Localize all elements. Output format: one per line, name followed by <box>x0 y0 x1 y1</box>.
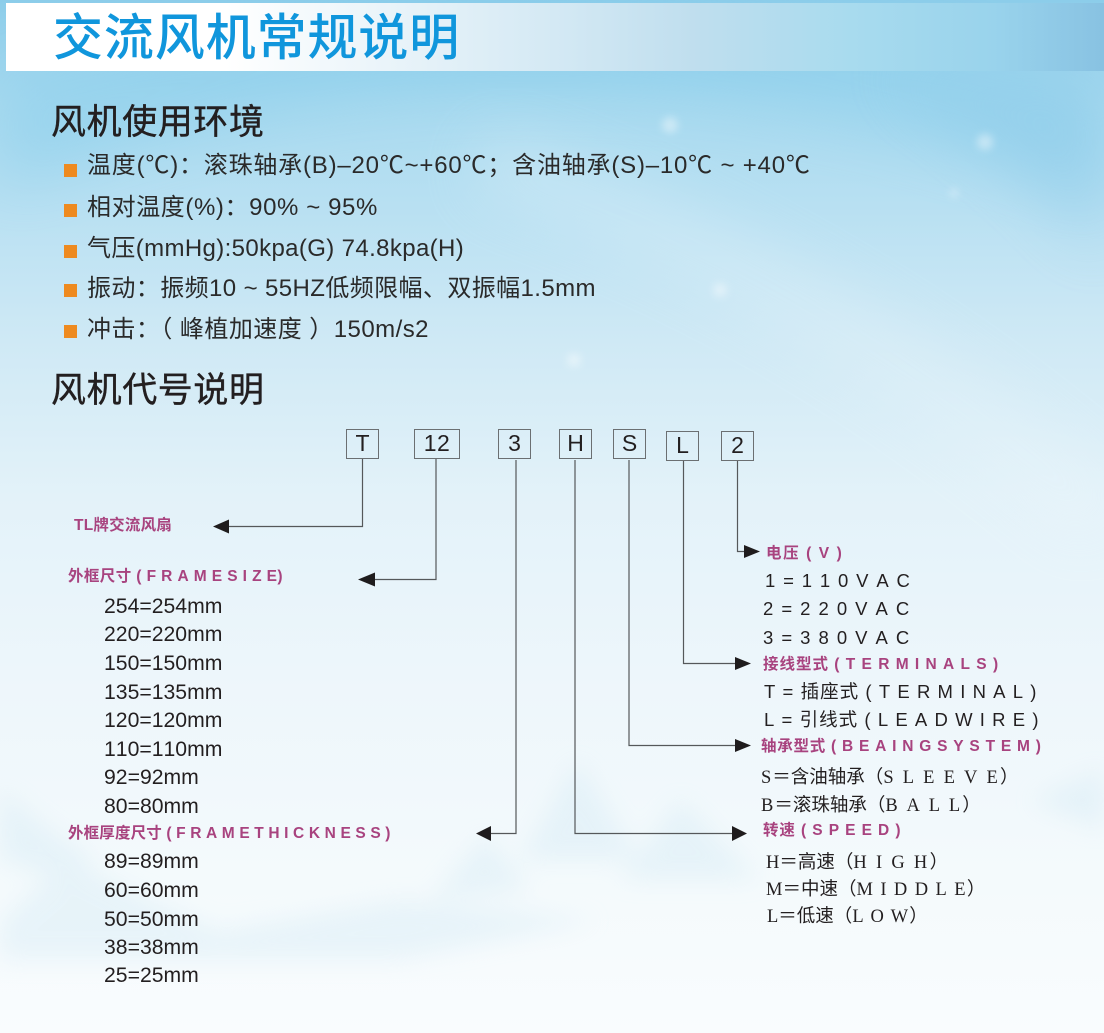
box 3: 3 <box>508 430 521 456</box>
size 135: 135=135mm <box>104 681 222 704</box>
size 254: 254=254mm <box>104 595 222 618</box>
speed option H: H＝高速（H I G H） <box>766 853 948 873</box>
thickness 25: 25=25mm <box>104 964 199 987</box>
box S <box>613 429 646 459</box>
box H: H <box>567 430 584 456</box>
box S: S <box>622 430 637 456</box>
voltage option 2: 2 = 2 2 0 V A C <box>763 598 911 619</box>
label: TL brand: TL牌交流风扇 <box>74 517 172 534</box>
label: terminals: 接线型式 ( T E R M I N A L S ) <box>763 656 999 673</box>
thickness 50: 50=50mm <box>104 908 199 931</box>
label: voltage: 电压 ( V ) <box>766 545 843 562</box>
list: operating environment <box>64 152 811 343</box>
box 2 <box>721 431 754 461</box>
bullet 3 <box>64 245 77 258</box>
terminal option T: T = 插座式 ( T E R M I N A L ) <box>764 681 1038 702</box>
speed option L: L＝低速（L O W） <box>767 907 928 927</box>
bullet 4 <box>64 284 77 297</box>
box T: T <box>355 430 370 456</box>
size 120: 120=120mm <box>104 709 222 732</box>
label: speed: 转速 ( S P E E D ) <box>763 822 901 839</box>
label: frame size: 外框尺寸 ( F R A M E S I Z E) <box>68 568 283 585</box>
bullet 1 <box>64 164 77 177</box>
bearing option S: S＝含油轴承（S L E E V E） <box>761 768 1019 788</box>
box 3 <box>498 429 531 459</box>
title banner <box>6 3 1104 71</box>
box H <box>559 429 592 459</box>
item: humidity: 相对温度(%)：90% ~ 95% <box>87 194 378 221</box>
size 150: 150=150mm <box>104 652 222 675</box>
label: bearing system: 轴承型式 ( B E A I N G S Y S T E M ) <box>761 738 1042 755</box>
code boxes <box>346 429 754 461</box>
bearing option B: B＝滚珠轴承（B A L L） <box>761 796 981 816</box>
item: vibration: 振动：振频10 ~ 55HZ低频限幅、双振幅1.5mm <box>87 275 596 302</box>
box 12 <box>414 429 460 459</box>
title text: 交流风机常规说明 <box>53 10 460 66</box>
box 12: 12 <box>424 430 450 456</box>
heading: model code: 风机代号说明 <box>51 371 265 410</box>
thickness 60: 60=60mm <box>104 879 199 902</box>
thickness 89: 89=89mm <box>104 850 199 873</box>
box L: L <box>676 432 689 458</box>
terminal option L: L = 引线式 ( L E A D W I R E ) <box>764 709 1040 730</box>
voltage option 3: 3 = 3 8 0 V A C <box>763 627 911 648</box>
bullet 5 <box>64 325 77 338</box>
box T <box>346 429 379 459</box>
list: frame sizes <box>104 595 222 818</box>
box L <box>666 431 699 461</box>
speed option M: M＝中速（M I D D L E） <box>766 880 985 900</box>
box 2: 2 <box>731 432 744 458</box>
size 220: 220=220mm <box>104 623 222 646</box>
item: shock: 冲击：（ 峰植加速度 ）150m/s2 <box>87 316 429 343</box>
thickness 38: 38=38mm <box>104 936 199 959</box>
voltage option 1: 1 = 1 1 0 V A C <box>765 570 911 591</box>
size 110: 110=110mm <box>104 738 222 761</box>
bullet 2 <box>64 204 77 217</box>
list: frame thickness <box>104 850 199 987</box>
label: frame thickness: 外框厚度尺寸 ( F R A M E T H I C K N E S S ) <box>68 825 391 842</box>
size 92: 92=92mm <box>104 766 199 789</box>
item: temperature: 温度(℃)：滚珠轴承(B)–20℃~+60℃；含油轴承(S)–10℃ ~ +40℃ <box>87 152 811 179</box>
item: pressure: 气压(mmHg):50kpa(G) 74.8kpa(H) <box>87 235 464 262</box>
size 80: 80=80mm <box>104 795 199 818</box>
heading: operating environment: 风机使用环境 <box>51 103 265 142</box>
